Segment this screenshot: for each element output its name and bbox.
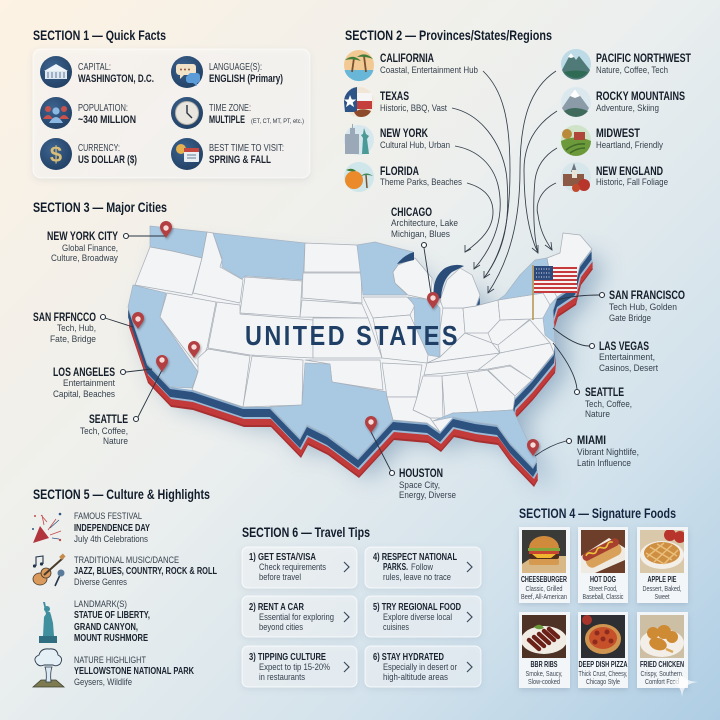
region: pacific northwest: Nature, Coffee, Tech xyxy=(596,65,668,76)
food: deep dish pizza: DEEP DISH PIZZA xyxy=(578,660,628,669)
panel: travel tips xyxy=(242,547,481,687)
fact: capital: CAPITAL: xyxy=(78,62,111,73)
leader lines and points xyxy=(100,234,604,476)
food: fried chicken: FRIED CHICKEN xyxy=(640,660,684,669)
food: apple pie: APPLE PIE xyxy=(648,575,676,584)
region: texas: TEXAS xyxy=(380,91,409,103)
region: california: CALIFORNIA xyxy=(380,53,434,65)
text: nature: YELLOWSTONE NATIONAL PARK xyxy=(74,666,194,677)
tip 3 xyxy=(242,646,357,687)
panel: regions list xyxy=(344,49,691,192)
city: san francisco right xyxy=(609,290,685,324)
great lakes xyxy=(397,252,464,300)
fact: best time to visit: SPRING & FALL xyxy=(209,154,271,166)
region: florida: Theme Parks, Beaches xyxy=(380,177,462,188)
tip 4 xyxy=(365,547,481,588)
city: san francisco left: SAN FRFNCCO xyxy=(33,312,96,324)
tip 6: high-altitude areas xyxy=(383,672,448,682)
city: new york city: Culture, Broadway xyxy=(51,253,118,264)
text: landmarks: LANDMARK(S) xyxy=(74,599,127,609)
icon: new england town xyxy=(561,162,591,192)
icon: guitar xyxy=(33,554,66,586)
region: california xyxy=(380,53,478,76)
tip 2 xyxy=(242,596,357,637)
region: midwest: Heartland, Friendly xyxy=(596,140,663,151)
fact: languages: LANGUAGE(S): xyxy=(209,62,262,73)
food: cheeseburger: Beef, All-American xyxy=(521,592,567,601)
text: nature: NATURE HIGHLIGHT xyxy=(74,655,146,665)
region: new england xyxy=(596,166,668,188)
city: las vegas: LAS VEGAS xyxy=(599,341,649,353)
city: houston: Energy, Diverse xyxy=(399,490,456,501)
heading: section 2: SECTION 2 — Provinces/States/Regions xyxy=(345,27,552,43)
food: hot dog: Street Food, xyxy=(588,584,618,593)
city: seattle left xyxy=(80,414,128,447)
fact: best time to visit xyxy=(209,143,284,166)
food: apple pie: Sweet xyxy=(654,592,670,601)
fact: time zone: TIME ZONE: xyxy=(209,103,251,114)
region: new york xyxy=(380,128,450,151)
city: miami: MIAMI xyxy=(577,435,606,447)
region: new york: NEW YORK xyxy=(380,128,429,140)
text: music: JAZZ, BLUES, COUNTRY, ROCK & ROLL xyxy=(74,566,217,577)
panel: quick facts xyxy=(33,49,310,178)
icon: dollar xyxy=(40,138,72,170)
city: san francisco right: Gate Bridge xyxy=(609,313,651,324)
fact: currency: US DOLLAR ($) xyxy=(78,154,137,166)
text: landmarks: STATUE OF LIBERTY, xyxy=(74,610,150,621)
food: fried chicken: Comfort Food xyxy=(645,677,679,686)
text: music: TRADITIONAL MUSIC/DANCE xyxy=(74,555,179,565)
food: deep dish pizza: Thick Crust, Cheesy, xyxy=(578,669,628,678)
tip 1 xyxy=(242,547,357,588)
city labels and pins xyxy=(33,207,685,501)
region: texas xyxy=(380,91,447,114)
icon: midwest farm xyxy=(561,125,591,156)
sparkle xyxy=(668,673,698,697)
fact: languages xyxy=(209,62,283,85)
icon: rocky mountains xyxy=(561,87,591,117)
tip 5: cuisines xyxy=(383,622,409,632)
region: midwest: MIDWEST xyxy=(596,128,640,140)
panel: culture and highlights xyxy=(32,511,217,687)
fact: currency: CURRENCY: xyxy=(78,143,120,154)
text: landmarks xyxy=(74,599,150,644)
icon: sun and calendar xyxy=(171,138,203,170)
tip 4: Follow xyxy=(411,562,433,572)
fact: time zone xyxy=(209,103,304,126)
icon: party popper xyxy=(32,513,61,543)
city: houston: Space City, xyxy=(399,480,440,491)
icon: statue of liberty xyxy=(39,602,57,643)
city: miami: Latin Influence xyxy=(577,458,631,469)
food: fried chicken: Crispy, Southern, xyxy=(640,669,684,678)
fact: population: ~340 MILLION xyxy=(78,114,136,126)
tip 3: in restaurants xyxy=(259,672,305,682)
tip 3: Expect to tip 15-20% xyxy=(259,662,330,672)
region: new england: NEW ENGLAND xyxy=(596,166,663,178)
city: new york city: NEW YORK CITY xyxy=(47,231,118,243)
food: deep dish pizza xyxy=(578,612,628,688)
region: pacific northwest xyxy=(596,53,691,76)
icon: new york skyline xyxy=(344,124,374,155)
city: seattle right: SEATTLE xyxy=(585,387,624,399)
city: miami xyxy=(577,435,639,469)
text: festival: FAMOUS FESTIVAL xyxy=(74,511,142,521)
tip 5 xyxy=(365,596,481,637)
text: festival: July 4th Celebrations xyxy=(74,534,148,544)
city: seattle left: SEATTLE xyxy=(89,414,128,426)
tip 3: 3) TIPPING CULTURE xyxy=(249,652,326,663)
food: cheeseburger xyxy=(519,527,570,603)
tip 1: before travel xyxy=(259,572,301,582)
region: pacific northwest: PACIFIC NORTHWEST xyxy=(596,53,691,65)
heading: section 6: SECTION 6 — Travel Tips xyxy=(242,524,370,540)
fact: time zone: (ET, CT, MT, PT, etc.) xyxy=(251,118,304,125)
city: new york city: Global Finance, xyxy=(62,243,118,254)
city: chicago: Michigan, Blues xyxy=(391,229,450,240)
city: chicago: CHICAGO xyxy=(391,207,432,219)
city: san francisco right: Tech Hub, Golden xyxy=(609,302,677,313)
map title: UNITED STATES xyxy=(245,320,460,351)
fact: population: POPULATION: xyxy=(78,103,128,114)
map: united states xyxy=(128,226,604,487)
food: cheeseburger: CHEESEBURGER xyxy=(521,575,567,584)
city: seattle left: Tech, Coffee, xyxy=(80,426,128,437)
icon: geyser xyxy=(33,649,64,687)
tip 4: PARKS. xyxy=(383,562,408,573)
city: seattle right xyxy=(585,387,632,420)
city: las vegas: Entertainment, xyxy=(599,352,655,363)
text: landmarks: MOUNT RUSHMORE xyxy=(74,633,148,644)
icon: speech bubbles xyxy=(171,56,203,88)
fact: currency xyxy=(78,143,137,166)
icon: texas flag xyxy=(344,87,374,117)
icon: people xyxy=(40,97,72,129)
region: texas: Historic, BBQ, Vast xyxy=(380,103,447,114)
city: chicago xyxy=(391,207,458,240)
city: san francisco left xyxy=(33,312,96,345)
text: music xyxy=(74,555,217,587)
food: cheeseburger: Classic, Grilled xyxy=(526,584,562,593)
fact: capital xyxy=(78,62,154,85)
food: hot dog: Baseball, Classic xyxy=(582,592,624,601)
food: hot dog xyxy=(578,527,628,603)
text: festival: INDEPENDENCE DAY xyxy=(74,523,150,534)
city: los angeles: LOS ANGELES xyxy=(53,367,115,379)
food: apple pie: Dessert, Baked, xyxy=(642,584,682,593)
heading: section 3: SECTION 3 — Major Cities xyxy=(33,199,167,215)
icon: pacific northwest mountain xyxy=(561,49,591,80)
tip 6: 6) STAY HYDRATED xyxy=(373,652,444,663)
text: nature xyxy=(74,655,194,687)
map pins xyxy=(132,221,539,456)
region: rocky mountains xyxy=(596,91,685,114)
tip 5: Explore diverse local xyxy=(383,612,452,622)
region: new england: Historic, Fall Foliage xyxy=(596,177,668,188)
heading: section 5: SECTION 5 — Culture & Highlights xyxy=(33,486,210,502)
tip 2: Essential for exploring xyxy=(259,612,334,622)
tip 2: beyond cities xyxy=(259,622,303,632)
food: bbq ribs xyxy=(519,612,570,688)
city: seattle left: Nature xyxy=(103,436,128,447)
icon: california palms xyxy=(344,50,374,81)
panel: signature foods xyxy=(519,527,688,688)
heading: section 4: SECTION 4 — Signature Foods xyxy=(519,505,676,521)
food: bbq ribs: BBR RIBS xyxy=(530,660,558,669)
city: houston: HOUSTON xyxy=(399,468,443,480)
city: seattle right: Nature xyxy=(585,409,610,420)
city: new york city xyxy=(47,231,118,264)
section 2 connector arrows xyxy=(452,71,557,293)
text: nature: Geysers, Wildlife xyxy=(74,677,132,687)
food: hot dog: HOT DOG xyxy=(590,575,616,584)
city: san francisco right: SAN FRANCISCO xyxy=(609,290,685,302)
icon: florida orange xyxy=(344,162,374,192)
city: san francisco left: Tech, Hub, xyxy=(57,323,96,334)
food: deep dish pizza: Chicago Style xyxy=(586,677,620,686)
city: san francisco left: Fate, Bridge xyxy=(50,334,96,345)
tip 4: rules, leave no trace xyxy=(383,572,451,582)
text: festival xyxy=(74,511,150,544)
tip 5: 5) TRY REGIONAL FOOD xyxy=(373,602,461,613)
states xyxy=(128,226,592,467)
tip 6 xyxy=(365,646,481,687)
city: houston xyxy=(399,468,456,501)
tip 4: 4) RESPECT NATIONAL xyxy=(373,552,457,563)
tip 6: Especially in desert or xyxy=(383,662,457,672)
tip 1: Check requirements xyxy=(259,562,326,572)
flag xyxy=(533,265,577,320)
food: fried chicken xyxy=(637,612,688,688)
fact: population xyxy=(78,103,136,126)
text: music: Diverse Genres xyxy=(74,577,127,587)
region: rocky mountains: ROCKY MOUNTAINS xyxy=(596,91,685,103)
region: midwest xyxy=(596,128,663,151)
heading: section 1: SECTION 1 — Quick Facts xyxy=(33,27,166,43)
city: las vegas: Casinos, Desert xyxy=(599,363,658,374)
region: new york: Cultural Hub, Urban xyxy=(380,140,450,151)
fact: languages: ENGLISH (Primary) xyxy=(209,73,283,85)
city: seattle right: Tech, Coffee, xyxy=(585,399,632,410)
city: las vegas xyxy=(599,341,658,374)
city: los angeles: Entertainment xyxy=(63,378,115,389)
fact: capital: WASHINGTON, D.C. xyxy=(78,73,154,85)
food: bbq ribs: Smoke, Saucy, xyxy=(526,669,562,678)
food: bbq ribs: Slow-cooked xyxy=(528,677,560,686)
region: rocky mountains: Adventure, Skiing xyxy=(596,103,659,114)
fact: time zone: MULTIPLE xyxy=(209,114,245,126)
city: los angeles xyxy=(53,367,115,400)
icon: capitol building xyxy=(40,56,72,88)
city: los angeles: Capital, Beaches xyxy=(53,389,115,400)
icon: dollar: $ xyxy=(50,142,62,167)
region: florida: FLORIDA xyxy=(380,166,419,178)
food: apple pie xyxy=(637,527,688,603)
city: miami: Vibrant Nightlife, xyxy=(577,447,639,458)
region: california: Coastal, Entertainment Hub xyxy=(380,65,478,76)
city: chicago: Architecture, Lake xyxy=(391,218,458,229)
tip 1: 1) GET ESTA/VISA xyxy=(249,552,316,563)
region: florida xyxy=(380,166,462,188)
text: landmarks: GRAND CANYON, xyxy=(74,622,138,633)
tip 2: 2) RENT A CAR xyxy=(249,602,304,613)
fact: best time to visit: BEST TIME TO VISIT: xyxy=(209,143,284,154)
icon: clock xyxy=(171,97,203,129)
